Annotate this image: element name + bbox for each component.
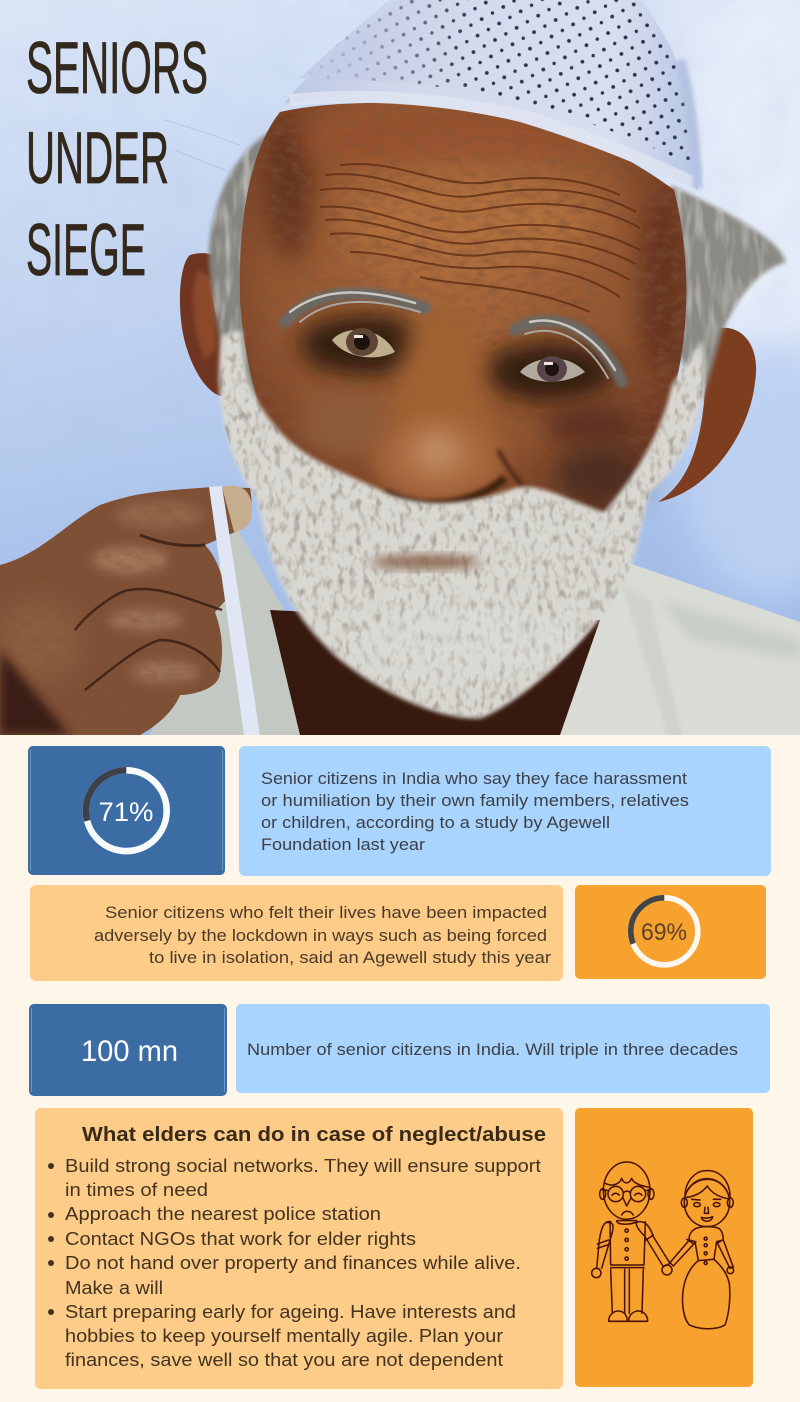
panel: elderly couple illustration	[575, 1108, 753, 1387]
panel: family harassment text: or children, according to a study by Agewell	[261, 814, 610, 832]
bullet list: Make a will	[65, 1278, 163, 1298]
donut chart: 69%	[631, 898, 698, 965]
panel: family harassment text: Senior citizens in India who say they face harassment	[261, 770, 687, 788]
panel: lockdown impact text: to live in isolation, said an Agewell study this year	[149, 949, 552, 967]
panel: lockdown impact text: adversely by the lockdown in ways such as being forced	[94, 927, 547, 945]
title: Seniors Under Siege	[26, 28, 208, 291]
bullet list: in times of need	[65, 1180, 208, 1200]
bullet list: Approach the nearest police station	[65, 1204, 381, 1224]
panel: 100 mn stat tile: 100 mn	[81, 1035, 178, 1068]
panel: 69% stat tile	[575, 885, 766, 979]
heading: What elders can do in case of neglect/abuse	[82, 1124, 546, 1146]
panel: 100 mn stat tile	[29, 1004, 227, 1096]
hero photo: elderly man in white cap	[0, 0, 800, 740]
bullet list: Do not hand over property and finances while alive.	[65, 1253, 521, 1273]
donut chart: 71%: 71%	[98, 797, 154, 827]
bullet list: finances, save well so that you are not dependent	[65, 1350, 503, 1370]
panel: family harassment text	[239, 746, 771, 876]
bullet list: Start preparing early for ageing. Have interests and	[65, 1302, 516, 1322]
panel: lockdown impact text	[30, 885, 563, 981]
panel: what elders can do	[35, 1108, 563, 1389]
bullet list	[48, 1156, 541, 1370]
panel: lockdown impact text: Senior citizens who felt their lives have been impacted	[105, 904, 547, 922]
bullet list: Build strong social networks. They will ensure support	[65, 1156, 541, 1176]
title: Seniors Under Siege: SIEGE	[26, 210, 146, 291]
panel: family harassment text: Foundation last year	[261, 836, 426, 854]
icon: elderly couple holding hands	[592, 1162, 734, 1329]
panel: senior population text: Number of senior citizens in India. Will triple in three decades	[247, 1041, 738, 1059]
bullet list: hobbies to keep yourself mentally agile. Plan your	[65, 1326, 503, 1346]
bullet list: Contact NGOs that work for elder rights	[65, 1229, 416, 1249]
title: Seniors Under Siege: SENIORS	[26, 28, 208, 109]
title: Seniors Under Siege: UNDER	[26, 118, 169, 199]
donut chart: 71%	[86, 770, 167, 851]
donut chart: 69%: 69%	[641, 919, 687, 946]
panel: senior population text	[236, 1004, 770, 1093]
panel: 71% stat tile	[28, 746, 225, 875]
panel: family harassment text: or humiliation by their own family members, relatives	[261, 792, 689, 810]
